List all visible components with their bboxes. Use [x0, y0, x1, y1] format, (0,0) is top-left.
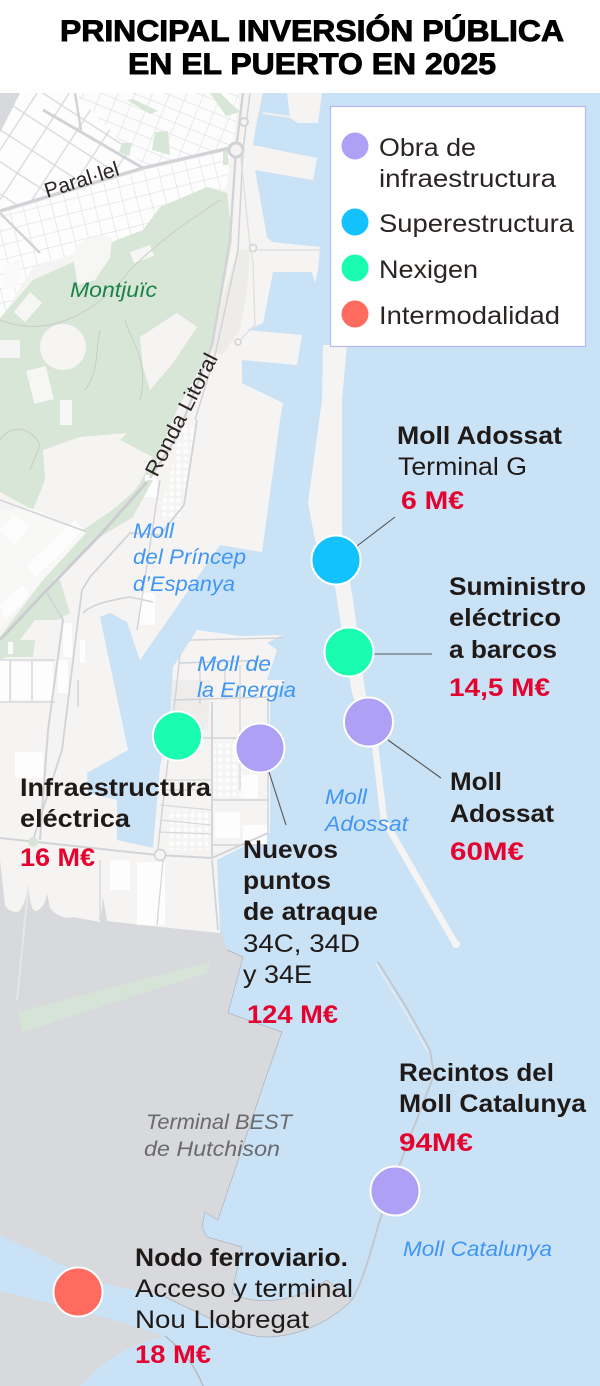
place label: Terminal BEST de Hutchison: de Hutchison: [144, 1137, 280, 1161]
place label: Moll de la Energia: la Energia: [197, 678, 296, 702]
industrial lower-left land: [30, 508, 85, 533]
marker: Nexigen infraestructura eléctrica: [153, 712, 202, 760]
callout: Moll Adossat 60M€: 60M€: [450, 838, 524, 866]
marker: nuevos puntos de atraque: [236, 724, 284, 772]
callout: Recintos del Moll Catalunya: 94M€: [399, 1129, 473, 1157]
callout: Nodo ferroviario: Acceso y terminal: [135, 1275, 353, 1303]
place label: Moll de la Energia: Moll de: [197, 652, 271, 676]
callout: Recintos del Moll Catalunya: Recintos del: [399, 1059, 554, 1087]
legend: Obra de: [379, 134, 476, 162]
callout: Suministro eléctrico a barcos: 14,5 M€: [449, 674, 550, 702]
place label: Montjuïc: Montjuïc: [70, 279, 158, 302]
callout: Nuevos puntos de atraque: 124 M€: [247, 1001, 338, 1029]
callout: Suministro eléctrico a barcos: [449, 573, 586, 702]
legend: Superestructura: [379, 210, 574, 238]
Terminal BEST grey land: [0, 835, 352, 1337]
city street grids: [0, 93, 145, 212]
city green patches: [119, 93, 240, 165]
title: EN EL PUERTO EN 2025: [128, 48, 496, 81]
marker: recintos Moll Catalunya: [370, 1166, 420, 1216]
callout: Moll Adossat 60M€: Adossat: [450, 800, 555, 828]
marker: nodo ferroviario: [54, 1268, 102, 1316]
place label: Moll Adossat: Moll: [325, 785, 368, 809]
place label: Moll Adossat: Adossat: [323, 812, 409, 836]
port land: [0, 93, 320, 933]
street label: Ronda Litoral: Ronda Litoral: [141, 350, 223, 480]
Moll Adossat breakwater: [308, 345, 460, 948]
place label: Moll del Príncep d'Espanya: del Príncep: [133, 545, 246, 569]
legend: infraestructura: [379, 165, 556, 193]
callout: Suministro eléctrico a barcos: a barcos: [449, 636, 557, 664]
place label: Moll Catalunya: Moll Catalunya: [403, 1237, 552, 1261]
marker: superestructura Moll Adossat: [312, 536, 360, 584]
pale dock road strip: [210, 250, 250, 355]
callout: Nuevos puntos de atraque: [243, 836, 378, 1029]
place label: Moll del Príncep d'Espanya: d’Espanya: [133, 572, 235, 596]
callout: Recintos del Moll Catalunya: [399, 1059, 587, 1157]
legend: [330, 106, 586, 346]
street label: Paral·lel: Paral·lel: [42, 158, 122, 203]
callout: Moll Adossat Terminal G: Terminal G: [398, 453, 527, 481]
callout: Moll Adossat Terminal G: 6 M€: [401, 487, 464, 515]
place label: Moll del Príncep d'Espanya: [133, 519, 246, 596]
callout: Moll Adossat Terminal G: [397, 422, 563, 515]
place label: Terminal BEST de Hutchison: Terminal BEST: [146, 1110, 294, 1134]
place label: Moll de la Energia: [197, 652, 296, 702]
callout: Moll Adossat 60M€: Moll: [450, 768, 502, 796]
green strip on terminal: [18, 962, 210, 1032]
callout: Nodo ferroviario: 18 M€: [135, 1341, 211, 1369]
leader lines: [269, 517, 441, 825]
roads: [0, 93, 320, 930]
marker: Nexigen suministro eléctrico: [324, 628, 374, 676]
callout: Nuevos puntos de atraque: de atraque: [243, 898, 378, 926]
Montjuïc green: [0, 187, 232, 533]
callout: Nodo ferroviario: Nodo ferroviario.: [135, 1244, 348, 1272]
callout: Moll Adossat Terminal G: Moll Adossat: [397, 422, 563, 450]
callout: Infraestructura eléctrica: eléctrica: [20, 805, 131, 833]
callout: Suministro eléctrico a barcos: eléctrico: [449, 604, 561, 632]
callout: Infraestructura eléctrica: [20, 774, 212, 872]
place label: Moll Adossat: [323, 785, 409, 836]
callout: Nuevos puntos de atraque: Nuevos: [243, 836, 338, 864]
place label: Terminal BEST de Hutchison: [144, 1110, 294, 1161]
Catalunya breakwater: [352, 962, 434, 1300]
callout: Nuevos puntos de atraque: y 34E: [243, 961, 312, 989]
legend: Intermodalidad: [379, 302, 560, 330]
callout: Nuevos puntos de atraque: puntos: [243, 867, 331, 895]
place label: Moll del Príncep d'Espanya: Moll: [133, 519, 175, 543]
marker: infraestructura Moll Adossat: [344, 698, 393, 746]
callout: Infraestructura eléctrica: 16 M€: [20, 844, 95, 872]
callout: Suministro eléctrico a barcos: Suministro: [449, 573, 586, 601]
title: PRINCIPAL INVERSIÓN PÚBLICA: [60, 14, 564, 48]
callout: Nodo ferroviario: Nou Llobregat: [135, 1306, 309, 1334]
title: [60, 14, 564, 81]
callout: Nuevos puntos de atraque: 34C, 34D: [243, 930, 360, 958]
callout: Infraestructura eléctrica: Infraestructura: [20, 774, 212, 802]
callout: Nodo ferroviario: [135, 1244, 353, 1369]
callout: Moll Adossat 60M€: [450, 768, 555, 866]
grey corner: [0, 93, 20, 133]
legend: Nexigen: [379, 256, 478, 284]
port tanks: [158, 425, 195, 520]
callout: Recintos del Moll Catalunya: Moll Catalunya: [399, 1090, 587, 1118]
top pier: [287, 93, 322, 123]
southern grey land: [0, 1291, 165, 1386]
